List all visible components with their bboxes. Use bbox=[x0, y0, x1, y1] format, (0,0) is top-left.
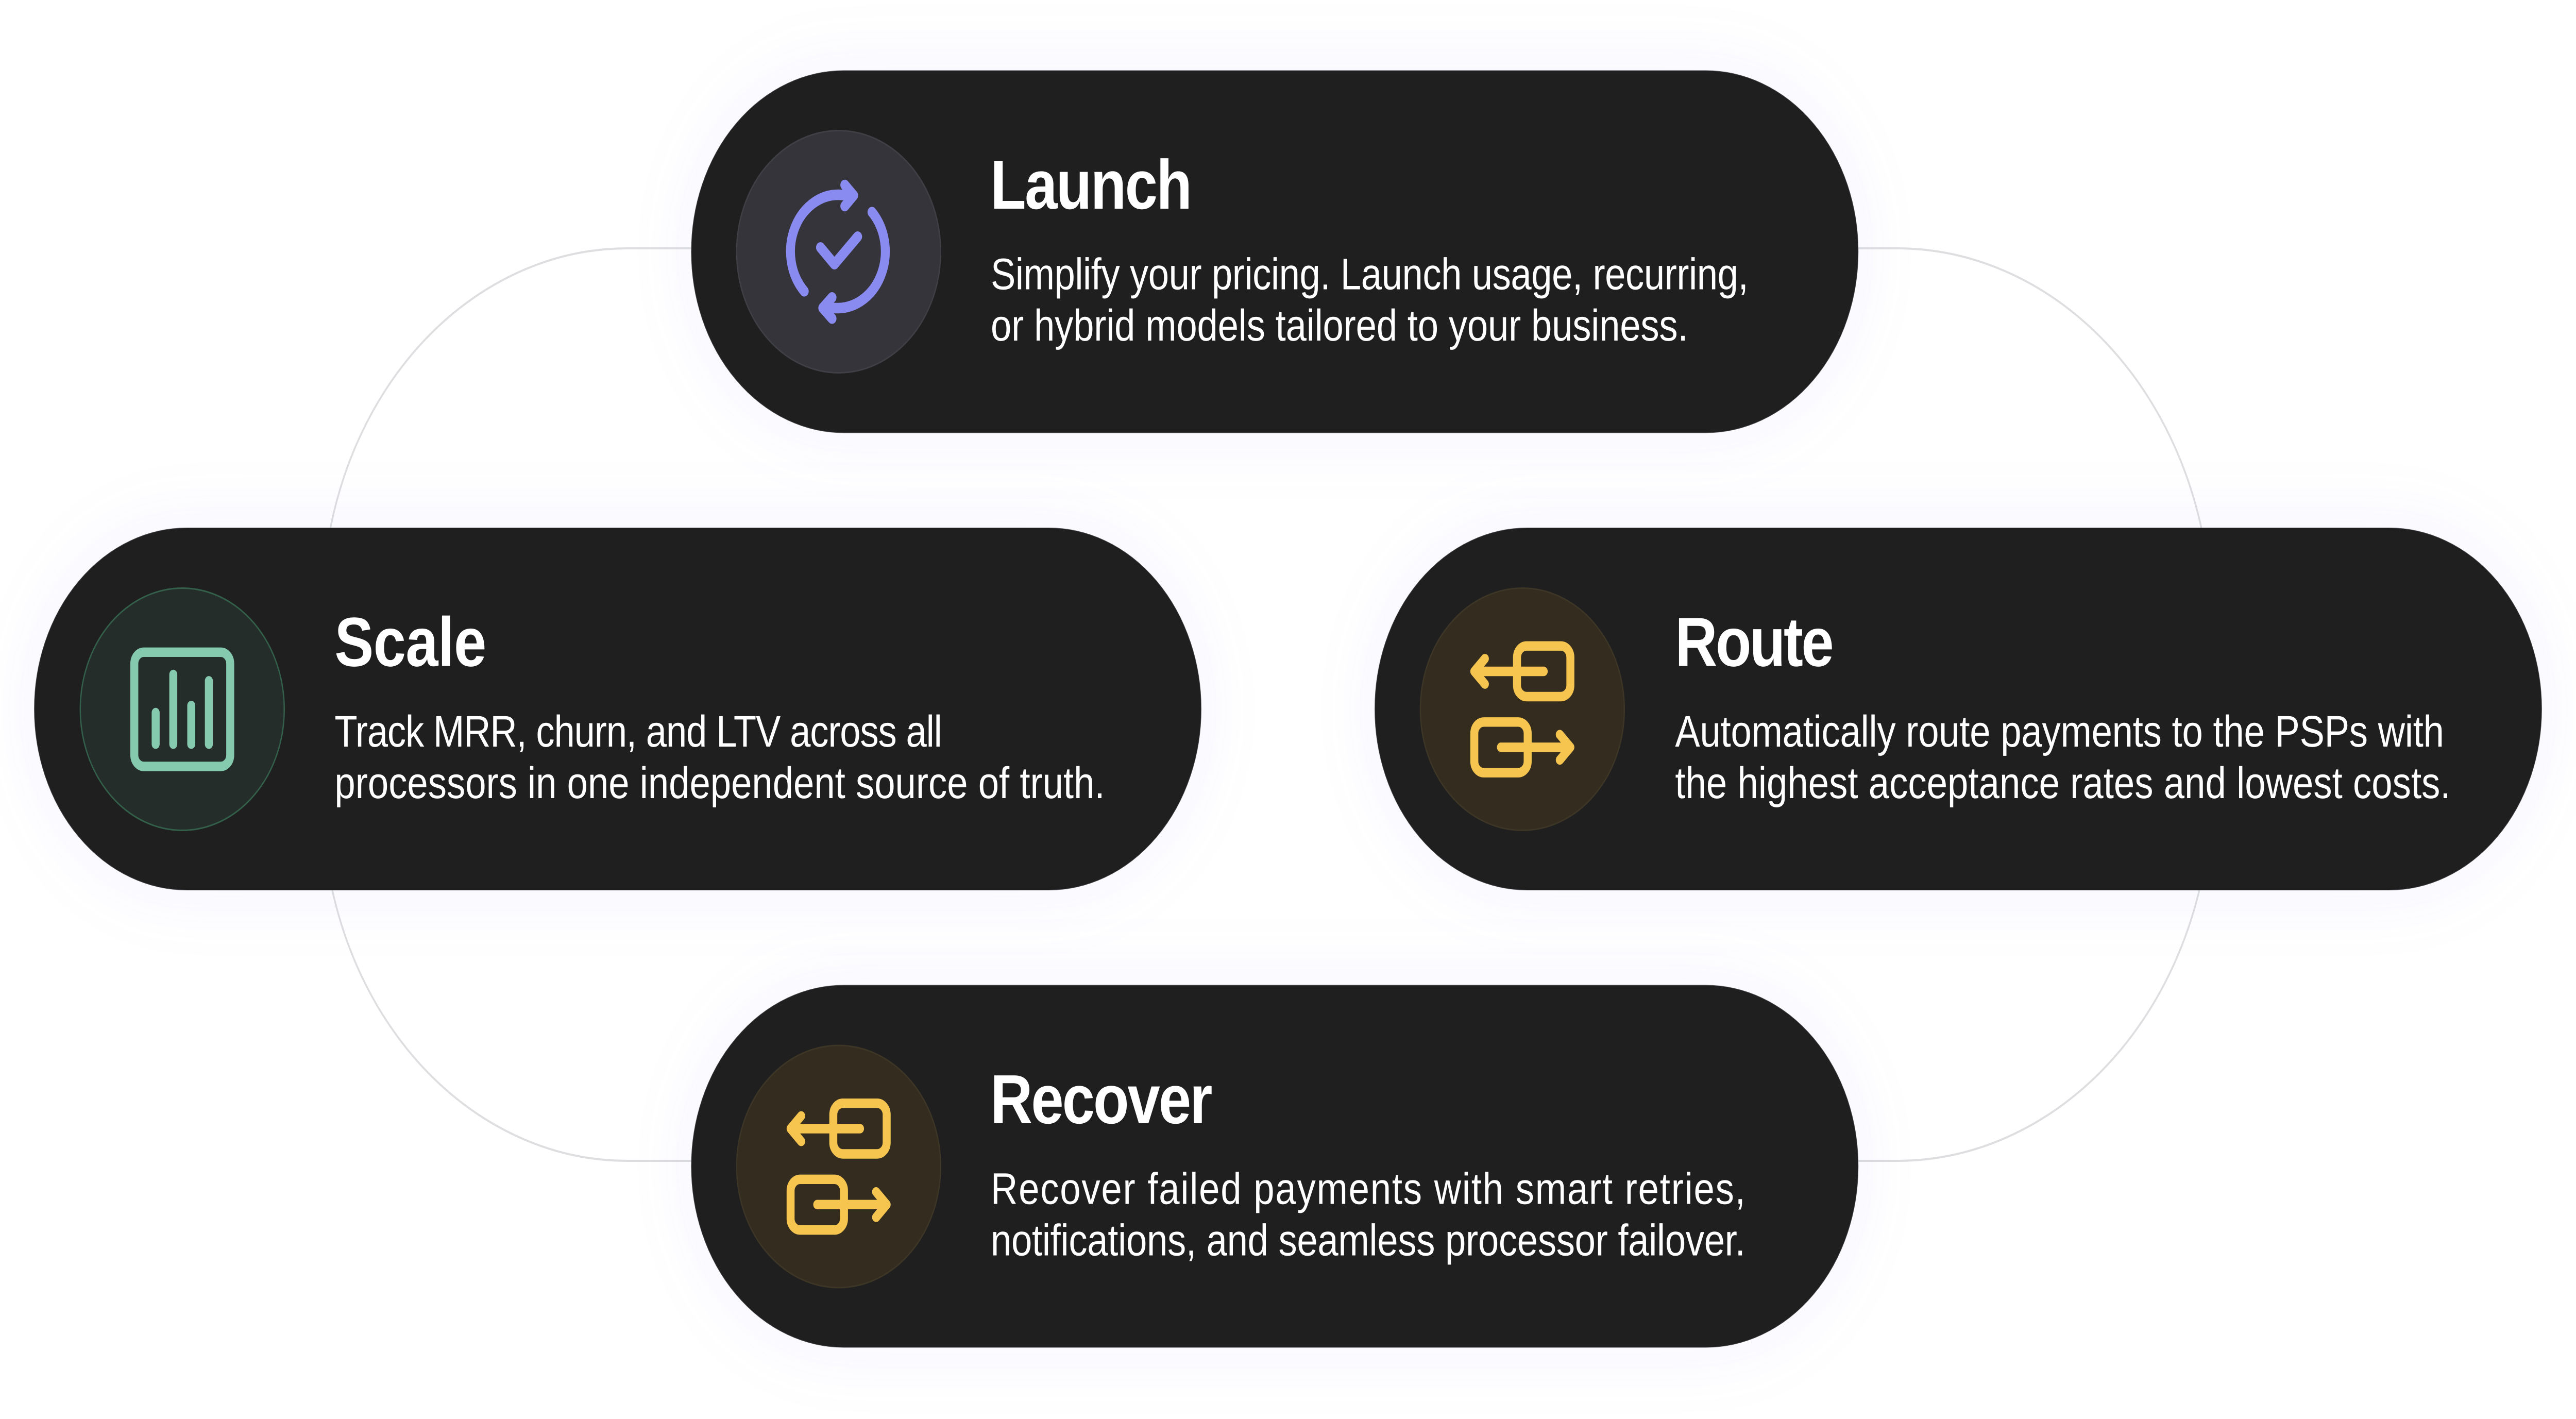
heading: Scale bbox=[334, 603, 486, 681]
panel: Recover bbox=[691, 985, 1858, 1347]
description: notifications, and seamless processor failover. bbox=[991, 1216, 1745, 1265]
panel: Route bbox=[1375, 528, 2541, 890]
panel: Launch bbox=[691, 71, 1858, 433]
pill background bbox=[1375, 528, 2541, 890]
description bbox=[991, 249, 1749, 350]
icon: refresh cycle with check bbox=[790, 185, 885, 318]
description bbox=[1675, 707, 2451, 808]
heading: Recover bbox=[990, 1060, 1212, 1138]
description: the highest acceptance rates and lowest costs. bbox=[1675, 758, 2451, 808]
pill background bbox=[35, 528, 1201, 890]
description: processors in one independent source of truth. bbox=[334, 758, 1105, 808]
connector: top right bbox=[1853, 248, 2211, 670]
pill background bbox=[691, 985, 1858, 1347]
description: Automatically route payments to the PSPs with bbox=[1675, 707, 2444, 756]
pill background bbox=[691, 71, 1858, 433]
panel: Scale bbox=[35, 528, 1201, 890]
icon circle bbox=[80, 588, 284, 831]
icon circle bbox=[1420, 588, 1624, 831]
icon circle bbox=[737, 1045, 941, 1288]
description bbox=[991, 1164, 1745, 1265]
icon: recover arrows through boxes bbox=[791, 1103, 887, 1230]
heading: Route bbox=[1675, 603, 1834, 681]
icon: bar chart in a frame bbox=[134, 652, 230, 767]
connector: cycle ring linking the four steps bbox=[323, 248, 2211, 1161]
icon circle bbox=[737, 131, 941, 373]
connector: bottom right bbox=[1853, 747, 2211, 1161]
description: Track MRR, churn, and LTV across all bbox=[334, 707, 942, 756]
description: Recover failed payments with smart retries, bbox=[991, 1164, 1745, 1214]
description bbox=[334, 707, 1105, 808]
heading: Launch bbox=[990, 146, 1192, 224]
connector: bottom left bbox=[323, 747, 694, 1161]
description: or hybrid models tailored to your business. bbox=[991, 301, 1688, 350]
icon: route arrows through boxes bbox=[1475, 646, 1570, 773]
description: Simplify your pricing. Launch usage, recurring, bbox=[991, 249, 1749, 299]
connector: top left bbox=[323, 248, 694, 670]
